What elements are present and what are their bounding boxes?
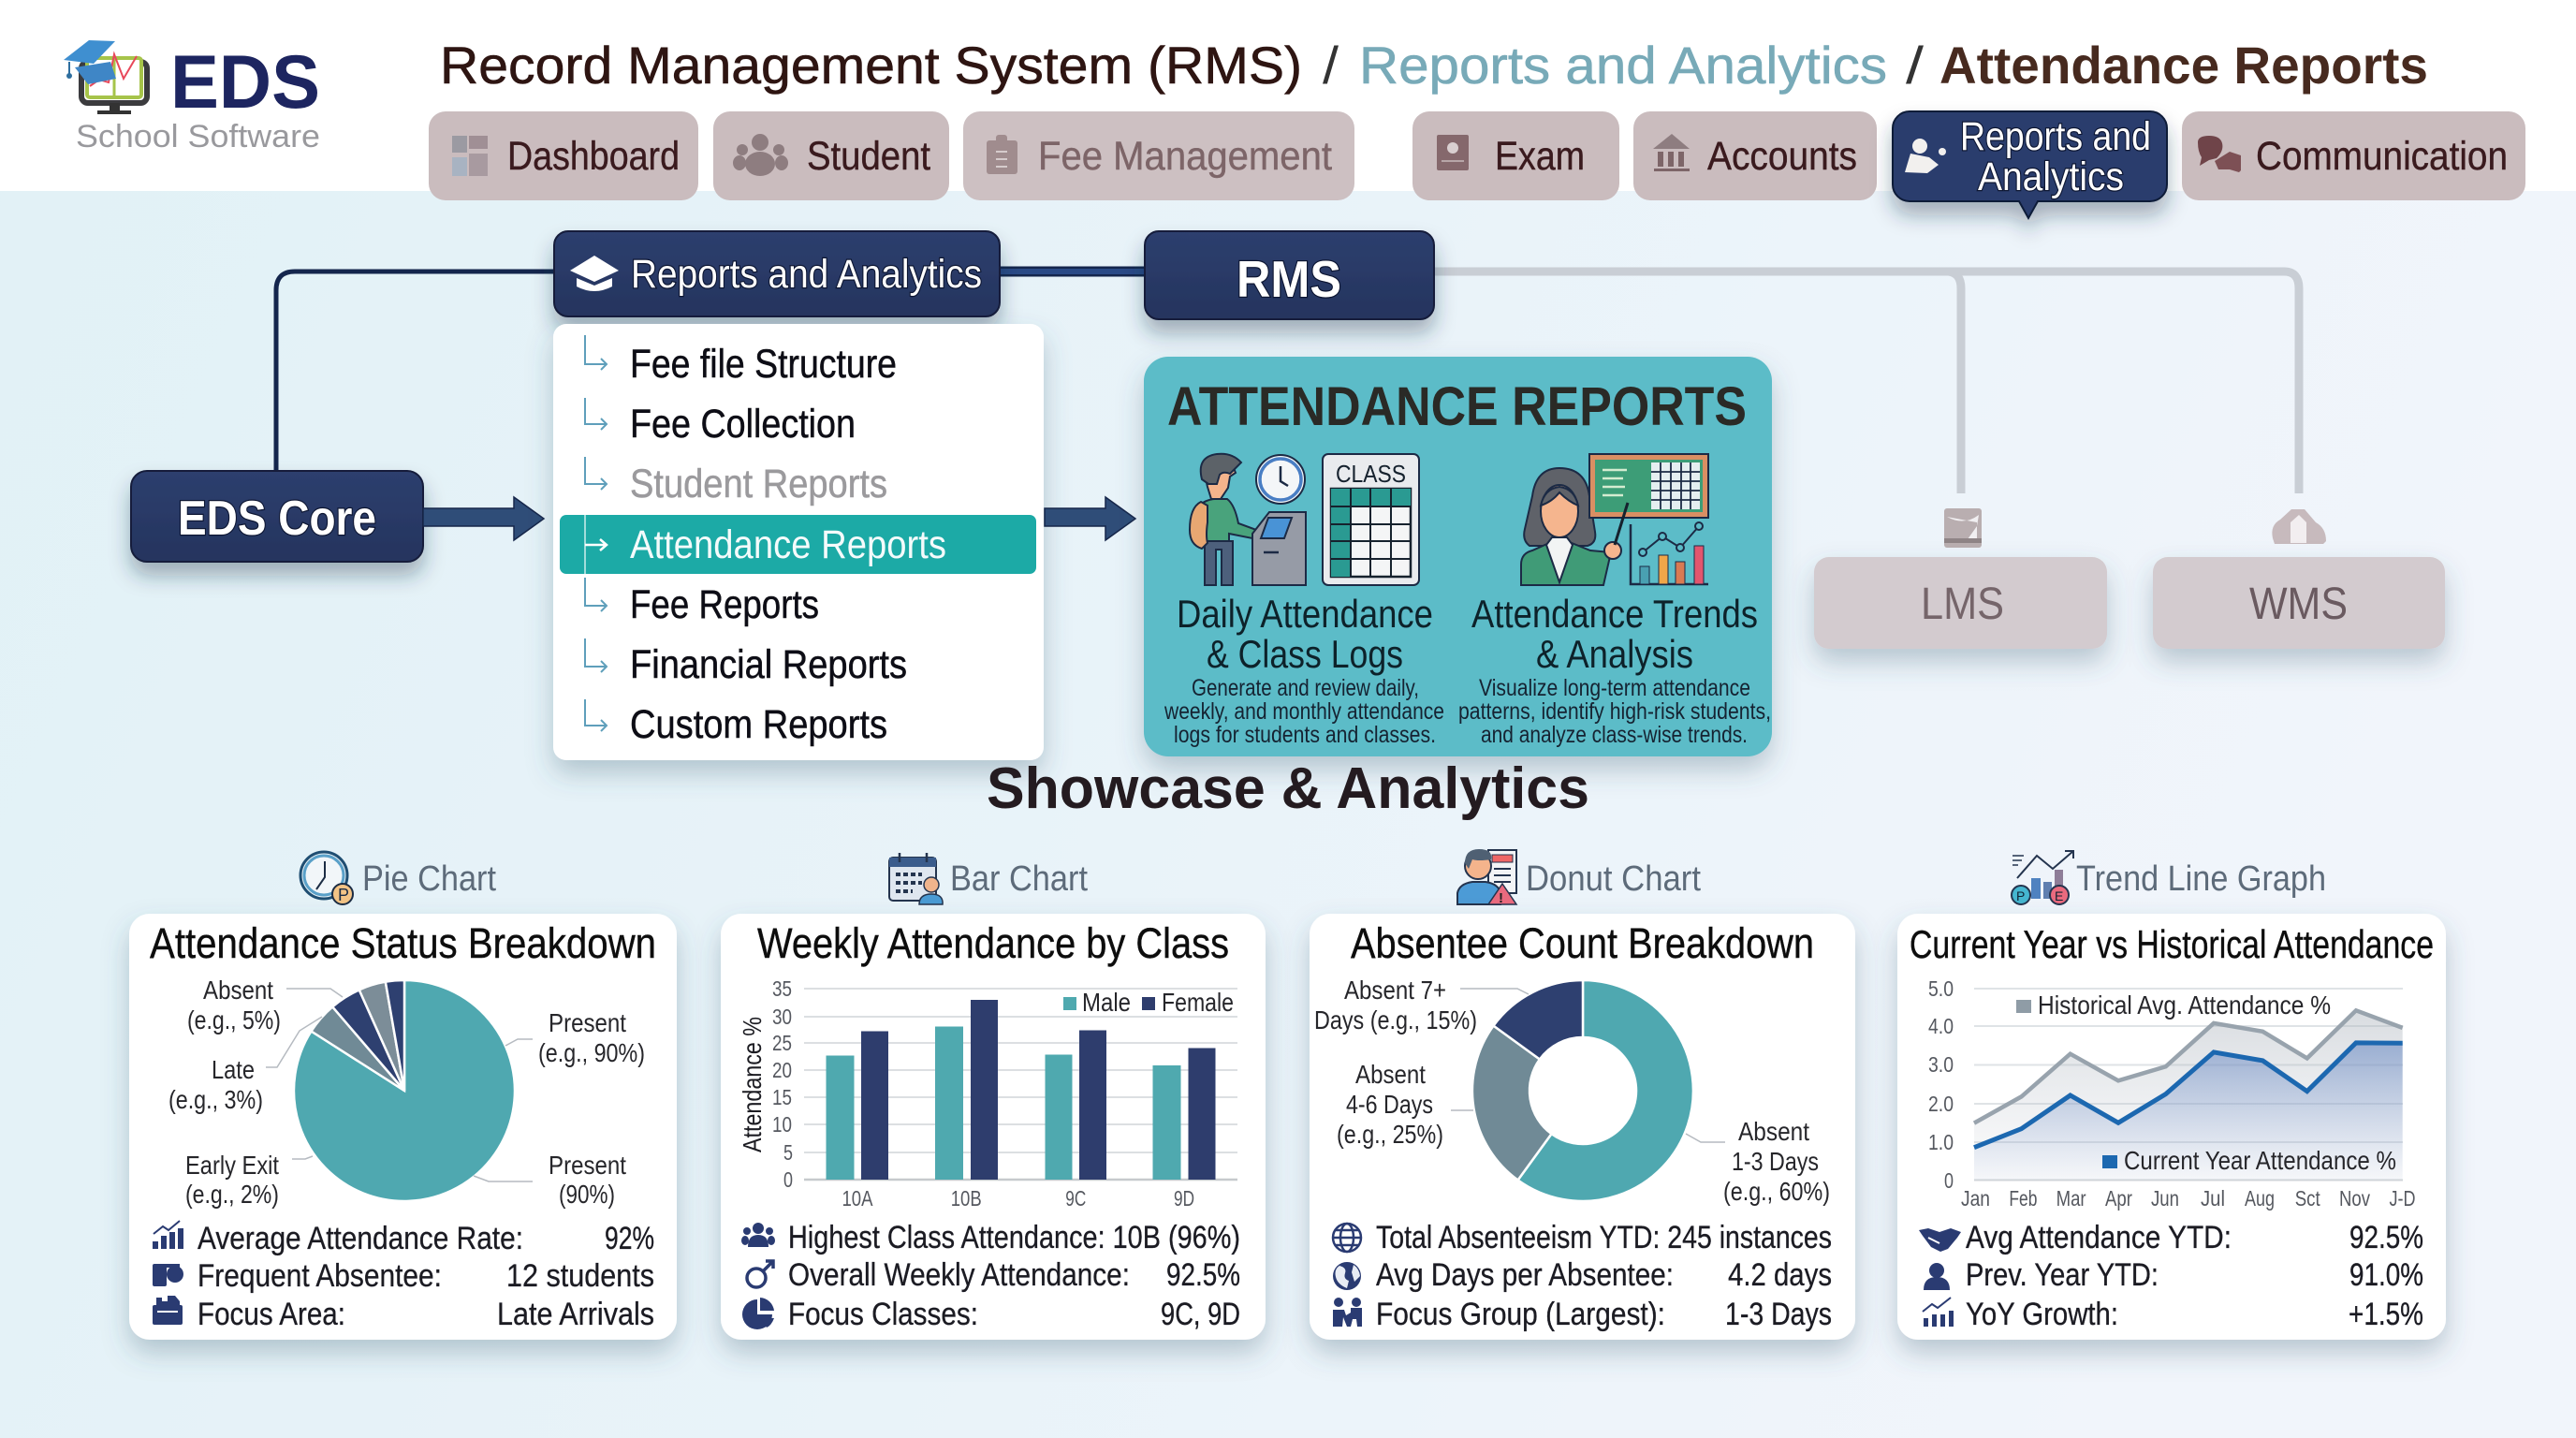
tab: Exam <box>1412 111 1619 200</box>
stat rows: Focus Group (Largest): <box>1376 1297 1665 1332</box>
icon: bars with arrow <box>153 1221 183 1249</box>
icon: student at kiosk <box>1190 454 1306 585</box>
text: Attendance Trends: patterns, identify high-risk students, <box>1458 698 1771 725</box>
x axis labels: Aug <box>2245 1186 2275 1211</box>
stat rows: 91.0% <box>2349 1257 2423 1293</box>
pie labels: Absent <box>203 976 273 1005</box>
tab: Fee Management: Fee Management <box>1038 134 1332 179</box>
trend chart <box>1928 976 2415 1211</box>
menu items <box>585 335 607 731</box>
text: Daily Attendance: logs for students and classes. <box>1174 722 1436 748</box>
legend: current: Current Year Attendance % <box>2124 1146 2396 1175</box>
tab: Fee Management <box>963 111 1354 200</box>
tab: Reports and Analytics active <box>1893 111 2167 218</box>
y axis labels: 0 <box>783 1167 793 1192</box>
title breadcrumb: Attendance Reports <box>1939 36 2428 95</box>
chart label: Bar Chart <box>889 853 1088 904</box>
donut labels: (e.g., 25%) <box>1337 1120 1443 1149</box>
donut labels: 1-3 Days <box>1732 1147 1819 1176</box>
box: WMS: WMS <box>2249 580 2348 629</box>
tab: Reports and Analytics active: Analytics <box>1978 154 2124 199</box>
tab: Accounts <box>1633 111 1877 200</box>
y axis labels: 5 <box>783 1140 793 1165</box>
tab: Student <box>713 111 949 200</box>
card title: Absentee Count Breakdown <box>1351 919 1814 967</box>
y axis labels: 5.0 <box>1928 976 1954 1001</box>
icon: person <box>1924 1263 1950 1290</box>
icon: handshake <box>1919 1228 1961 1252</box>
text: Attendance Trends: Visualize long-term attendance <box>1479 675 1750 701</box>
tab: Dashboard <box>429 111 698 200</box>
icon: clock badge <box>300 852 353 904</box>
tab: Communication <box>2182 111 2525 200</box>
icon: class table <box>1323 454 1419 585</box>
y axis labels: 3.0 <box>1928 1052 1954 1077</box>
icon: person with report <box>1457 849 1516 906</box>
chart label: Donut Chart <box>1457 849 1701 906</box>
chart label: Trend Line Graph <box>2012 851 2326 904</box>
icon: male symbol <box>747 1261 773 1287</box>
title breadcrumb: / <box>1906 36 1925 95</box>
tab: Dashboard: Dashboard <box>507 134 680 179</box>
y axis labels: 25 <box>772 1031 792 1055</box>
panel title: ATTENDANCE REPORTS <box>1167 376 1747 437</box>
stat rows: 92.5% <box>1166 1257 1240 1293</box>
panel: pie chart card <box>129 914 677 1340</box>
x axis labels: Jan <box>1961 1186 1990 1211</box>
x axis labels: Sct <box>2295 1186 2320 1211</box>
stat rows: Late Arrivals <box>497 1297 654 1332</box>
tab: Accounts: Accounts <box>1707 134 1857 179</box>
pie labels <box>168 976 645 1209</box>
logo wordmark: EDS <box>170 40 320 125</box>
y axis labels: 1.0 <box>1928 1130 1954 1154</box>
stat rows <box>1919 1220 2423 1332</box>
icon: class table: CLASS <box>1336 460 1406 488</box>
icon: wall clock <box>1256 455 1305 504</box>
icon: presentation board <box>1589 454 1708 545</box>
stat rows: Average Attendance Rate: <box>198 1221 523 1256</box>
y axis labels <box>1928 976 1954 1193</box>
tab: Communication: Communication <box>2256 134 2508 179</box>
x axis labels: Feb <box>2009 1186 2037 1211</box>
x axis labels: Jun <box>2151 1186 2179 1211</box>
connector: EDS Core to Reports and Analytics <box>276 271 1146 473</box>
x axis labels: 9D <box>1174 1186 1194 1211</box>
box: LMS <box>1814 557 2107 649</box>
icon: trend badges: E <box>2055 888 2063 903</box>
icon: two people <box>1333 1298 1362 1327</box>
stat rows <box>741 1220 1240 1332</box>
y axis labels <box>772 976 793 1192</box>
stat rows: YoY Growth: <box>1966 1297 2118 1332</box>
logo icon: monitor with cap <box>64 40 147 114</box>
tab: Exam: Exam <box>1495 134 1585 179</box>
panel: attendance reports <box>1144 357 1772 756</box>
x axis labels <box>1961 1186 2415 1211</box>
x axis labels <box>842 1186 1194 1211</box>
icon: person with report: ! <box>1499 890 1503 906</box>
title breadcrumb: Record Management System (RMS) <box>440 36 1302 95</box>
icon: LMS <box>1944 508 1982 548</box>
stat rows: Overall Weekly Attendance: <box>788 1257 1130 1293</box>
stat rows <box>1333 1220 1832 1332</box>
card title: Attendance Status Breakdown <box>150 919 656 967</box>
pie labels: Early Exit <box>185 1151 279 1180</box>
stat rows: 1-3 Days <box>1725 1297 1832 1332</box>
icon: trend badges <box>2012 851 2073 904</box>
legend <box>1063 988 1234 1017</box>
panel: reports menu: Fee file Structure <box>630 342 897 387</box>
icon: WMS <box>2272 509 2326 544</box>
text: Daily Attendance <box>1164 592 1444 748</box>
x axis labels: Mar <box>2056 1186 2086 1211</box>
donut labels: Absent 7+ <box>1344 976 1446 1005</box>
highlighted row: Attendance Reports: Attendance Reports <box>630 522 946 567</box>
chart label: Pie Chart <box>300 852 496 904</box>
panel: reports menu: Student Reports <box>630 462 887 506</box>
heading: Showcase & Analytics: Showcase & Analytics <box>987 756 1589 821</box>
pie chart <box>294 980 515 1201</box>
pie labels: Present <box>549 1151 626 1180</box>
y axis labels: 2.0 <box>1928 1092 1954 1116</box>
title breadcrumb <box>440 36 2428 95</box>
text: Attendance Trends <box>1458 592 1771 748</box>
icon: mortarboard <box>570 256 619 291</box>
y axis labels: 35 <box>772 976 792 1001</box>
icon: group <box>741 1223 775 1247</box>
text: Daily Attendance: weekly, and monthly attendance <box>1164 698 1444 725</box>
panel: trend line card <box>1897 914 2446 1340</box>
box: EDS Core <box>131 471 423 562</box>
panel: reports menu: Fee Reports <box>630 582 819 627</box>
pie labels: Late <box>212 1055 255 1084</box>
stat rows: Focus Classes: <box>788 1297 978 1332</box>
pie labels: (e.g., 5%) <box>187 1005 281 1034</box>
donut labels: Days (e.g., 15%) <box>1314 1005 1477 1034</box>
icon: growth bars <box>1923 1298 1954 1327</box>
stat rows: Avg Days per Absentee: <box>1376 1257 1674 1293</box>
logo <box>64 40 320 154</box>
logo tagline: School Software <box>76 119 320 154</box>
text: Attendance Trends: Attendance Trends <box>1471 592 1758 636</box>
icon: folder <box>153 1296 183 1325</box>
icon: pie <box>742 1298 774 1329</box>
panel: reports menu: Financial Reports <box>630 642 907 687</box>
stat rows: Prev. Year YTD: <box>1966 1257 2159 1293</box>
text: Attendance Trends: & Analysis <box>1536 632 1693 676</box>
panel: reports menu: Fee Collection <box>630 402 856 447</box>
stat rows: Total Absenteeism YTD: 245 instances <box>1376 1220 1832 1255</box>
x axis labels: Jul <box>2201 1186 2225 1211</box>
stat rows: 9C, 9D <box>1161 1297 1240 1332</box>
icon: absentee badge <box>153 1264 183 1286</box>
icon: teacher <box>1521 468 1621 585</box>
title breadcrumb: Reports and Analytics <box>1359 36 1887 95</box>
stat rows: 12 students <box>506 1258 654 1294</box>
donut labels <box>1314 976 1830 1206</box>
stat rows: Highest Class Attendance: 10B (96%) <box>788 1220 1240 1255</box>
pie labels: (90%) <box>559 1180 615 1209</box>
y axis labels: 10 <box>772 1112 792 1137</box>
stat rows: 4.2 days <box>1728 1257 1832 1293</box>
box: LMS: LMS <box>1921 580 2004 629</box>
icon: trend badges: P <box>2016 888 2025 903</box>
nav tabs <box>429 111 2525 218</box>
card title: Current Year vs Historical Attendance <box>1910 922 2434 966</box>
box: Reports and Analytics <box>554 231 1000 316</box>
icon: grid globe <box>1333 1224 1361 1252</box>
legend: historical: Historical Avg. Attendance % <box>2038 990 2331 1020</box>
text: Daily Attendance: Generate and review daily, <box>1192 675 1419 701</box>
chart label: Trend Line Graph: Trend Line Graph <box>2076 859 2326 899</box>
panel: reports menu: Custom Reports <box>630 702 887 747</box>
y axis labels: 4.0 <box>1928 1014 1954 1038</box>
card title: Weekly Attendance by Class <box>757 919 1229 967</box>
x axis labels: 10B <box>951 1186 982 1211</box>
stat rows: Focus Area: <box>198 1297 345 1332</box>
pie labels: (e.g., 2%) <box>185 1180 279 1209</box>
icon: calendar with person <box>889 853 943 904</box>
box: RMS <box>1145 231 1434 319</box>
stat rows: 92.5% <box>2349 1220 2423 1255</box>
y axis labels: 0 <box>1944 1168 1954 1193</box>
y axis labels: 20 <box>772 1058 792 1082</box>
connector: RMS to LMS and WMS <box>1434 271 2299 493</box>
x axis labels: Nov <box>2339 1186 2370 1211</box>
donut labels: Absent <box>1738 1117 1809 1146</box>
donut labels: 4-6 Days <box>1346 1090 1433 1119</box>
y axis title: Attendance % <box>738 1017 767 1152</box>
text: Daily Attendance: Daily Attendance <box>1177 592 1433 636</box>
panel: donut chart card <box>1310 914 1855 1340</box>
legend: Female <box>1162 988 1234 1017</box>
tab: Reports and Analytics active: Reports and <box>1960 114 2151 159</box>
y axis labels: 30 <box>772 1005 792 1029</box>
stat rows: Avg Attendance YTD: <box>1966 1220 2232 1255</box>
box: Reports and Analytics: Reports and Analytics <box>631 252 982 297</box>
panel: bar chart card <box>721 914 1266 1340</box>
chart label: Pie Chart: Pie Chart <box>362 859 496 899</box>
pie labels: Present <box>549 1008 626 1037</box>
highlighted row: Attendance Reports <box>560 515 1036 574</box>
donut labels: Absent <box>1355 1060 1426 1089</box>
stat rows: 92% <box>605 1221 654 1256</box>
pie labels: (e.g., 90%) <box>538 1038 645 1067</box>
stat rows: +1.5% <box>2349 1297 2423 1332</box>
x axis labels: Apr <box>2105 1186 2132 1211</box>
text: Daily Attendance: & Class Logs <box>1207 632 1403 676</box>
icon: bar and line chart <box>1631 522 1708 584</box>
bar chart <box>738 976 1237 1211</box>
legend: Male <box>1082 988 1131 1017</box>
text: Attendance Trends: and analyze class-wise trends. <box>1481 722 1748 748</box>
arrow: menu to attendance reports <box>1045 497 1135 540</box>
box: WMS <box>2153 557 2445 649</box>
x axis labels: 9C <box>1065 1186 1086 1211</box>
pie labels: (e.g., 3%) <box>168 1085 263 1114</box>
tab: Student: Student <box>807 134 930 179</box>
chart label: Bar Chart: Bar Chart <box>950 859 1088 899</box>
x axis labels: 10A <box>842 1186 873 1211</box>
icon: world <box>1333 1262 1361 1290</box>
box: EDS Core: EDS Core <box>178 492 376 546</box>
donut labels: (e.g., 60%) <box>1723 1177 1830 1206</box>
box: RMS: RMS <box>1237 250 1341 308</box>
panel: reports menu <box>553 324 1044 760</box>
stat rows: Frequent Absentee: <box>198 1258 442 1294</box>
chart label: Donut Chart: Donut Chart <box>1526 859 1701 899</box>
x axis labels: J-D <box>2389 1186 2415 1211</box>
stat rows <box>153 1221 654 1332</box>
arrow: EDS Core to menu <box>423 497 544 540</box>
icon: clock badge: P <box>338 886 349 904</box>
leader lines <box>1451 989 1725 1142</box>
leader lines <box>266 989 533 1181</box>
title breadcrumb: / <box>1323 36 1339 95</box>
donut chart <box>1472 980 1693 1201</box>
y axis labels: 15 <box>772 1085 792 1109</box>
